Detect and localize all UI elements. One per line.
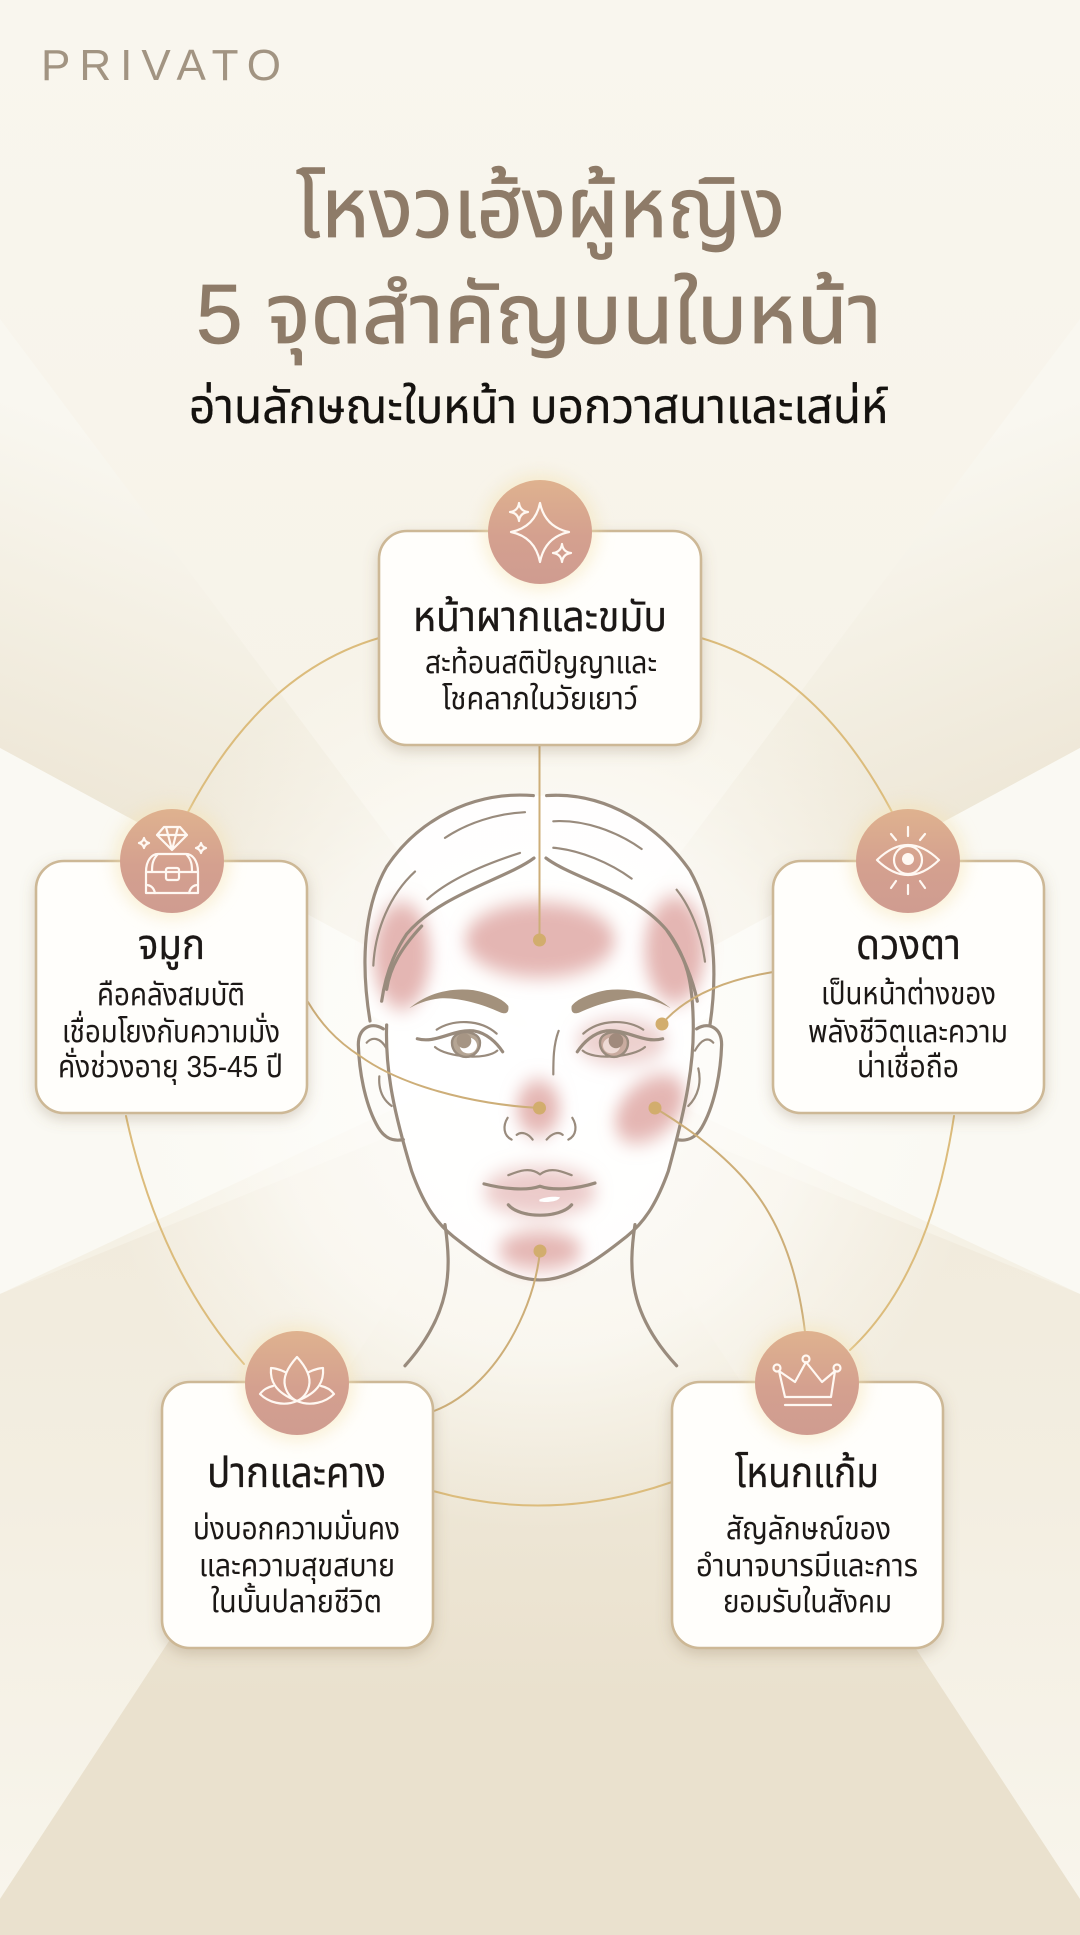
icon: crown [749, 1325, 865, 1441]
description: cheekbones [696, 1511, 918, 1619]
description: lips and chin: ในบั้นปลายชีวิต [211, 1582, 382, 1619]
description: lips and chin: และความสุขสบาย [199, 1548, 395, 1584]
description: lips and chin: บ่งบอกความมั่นคง [193, 1509, 400, 1546]
description: forehead [425, 645, 657, 716]
connector: nose [308, 1002, 546, 1114]
panel: nose [36, 803, 307, 1113]
panel: eyes [773, 803, 1044, 1113]
description: eyes: เป็นหน้าต่างของ [821, 976, 996, 1011]
left eye [417, 1031, 503, 1052]
icon: sparkles [482, 474, 598, 590]
connector: chin [434, 1244, 546, 1411]
eyebrows [409, 989, 508, 1013]
connector: eyes [656, 972, 773, 1030]
description: cheekbones: อำนาจบารมีและการ [696, 1548, 918, 1583]
description: forehead: โชคลาภในวัยเยาว์ [442, 681, 638, 716]
panel: cheekbones [672, 1325, 943, 1648]
title: 5 จุดสำคัญบนใบหน้า [196, 267, 882, 365]
description: nose [58, 977, 283, 1085]
description: nose: เชื่อมโยงกับความมั่ง [62, 1010, 280, 1049]
connector: cheek [648, 1102, 805, 1332]
description: eyes [808, 976, 1008, 1084]
right eye [577, 1031, 663, 1052]
connector: forehead [533, 745, 546, 946]
description: nose: คือคลังสมบัติ [97, 977, 245, 1012]
neck [405, 1225, 448, 1366]
panel: lips and chin [162, 1325, 433, 1648]
face contour [386, 932, 693, 1280]
nose [553, 1031, 559, 1074]
subtitle: อ่านลักษณะใบหน้า บอกวาสนาและเสน่ห์ [189, 381, 888, 434]
heading: cheekbones: โหนกแก้ม [735, 1449, 879, 1496]
title [196, 161, 882, 365]
face illustration [358, 795, 722, 1366]
description: eyes: น่าเชื่อถือ [857, 1045, 959, 1084]
description: cheekbones: ยอมรับในสังคม [723, 1584, 892, 1619]
golden ring connecting cards [126, 638, 954, 1506]
face skin fill [365, 795, 713, 1280]
description: eyes: พลังชีวิตและความ [808, 1014, 1008, 1049]
title: โหงวเฮ้งผู้หญิง [296, 161, 785, 259]
hair outline [365, 795, 533, 1021]
heading: eyes: ดวงตา [856, 921, 961, 968]
blush zones [373, 896, 705, 1269]
icon: eye [850, 803, 966, 919]
lips [508, 1170, 572, 1175]
description: forehead: สะท้อนสติปัญญาและ [425, 645, 657, 680]
icon: lotus [239, 1325, 355, 1441]
brand logo: PRIVATO [41, 41, 281, 90]
icon: treasure chest with diamond [114, 803, 230, 919]
description: cheekbones: สัญลักษณ์ของ [726, 1511, 891, 1546]
panel: forehead and temples [379, 474, 701, 745]
description: nose: คั่งช่วงอายุ 35-45 ปี [58, 1047, 283, 1085]
heading: nose: จมูก [138, 921, 205, 970]
heading: lips and chin: ปากและคาง [207, 1449, 386, 1496]
heading: forehead: หน้าผากและขมับ [413, 593, 667, 640]
ears [358, 1026, 403, 1140]
description: lips and chin [193, 1509, 400, 1619]
